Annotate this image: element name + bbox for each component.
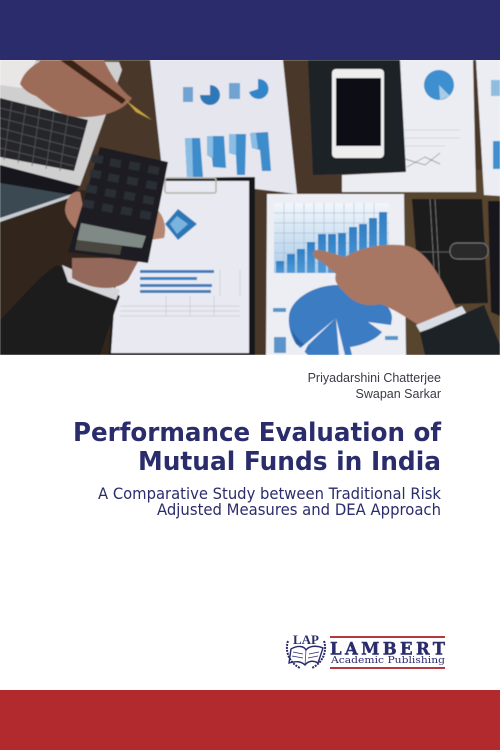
calculator: [68, 147, 168, 263]
chart paper with bars and pie: [266, 194, 406, 355]
book title: Mutual Funds in India: [138, 447, 441, 477]
book title: Performance Evaluation of: [73, 418, 442, 448]
paper with blue charts: [150, 60, 297, 194]
publisher logo: [287, 632, 446, 669]
far right paper: [476, 60, 500, 196]
top navy band: [0, 0, 500, 60]
laptop: [0, 60, 122, 222]
book title: [73, 418, 442, 477]
icon: LAP open book emblem: LAP: [293, 632, 319, 647]
clipboard with radar and bars: [109, 177, 255, 355]
subtitle: [98, 484, 442, 519]
subtitle: A Comparative Study between Traditional Risk: [98, 484, 442, 503]
bottom red band: [0, 690, 500, 750]
black wallets: [412, 199, 500, 316]
top-left hand with pen: [0, 60, 152, 120]
paper with pie and line chart: [342, 60, 476, 192]
author names: Priyadarshini Chatterjee: [308, 371, 441, 385]
logo wordmark: Academic Publishing: [330, 655, 445, 666]
author names: Swapan Sarkar: [356, 387, 441, 401]
logo wordmark: [330, 636, 446, 669]
pointing hand and right sleeve: [313, 245, 500, 355]
icon: LAP open book emblem: [287, 632, 325, 668]
logo wordmark: LAMBERT: [330, 640, 446, 658]
notebook and smartphone: [308, 60, 406, 175]
lower hand and dark suit: [0, 192, 165, 355]
cover photo: financial documents on desk: [0, 60, 500, 355]
author names: [308, 371, 441, 401]
subtitle: Adjusted Measures and DEA Approach: [157, 500, 441, 519]
